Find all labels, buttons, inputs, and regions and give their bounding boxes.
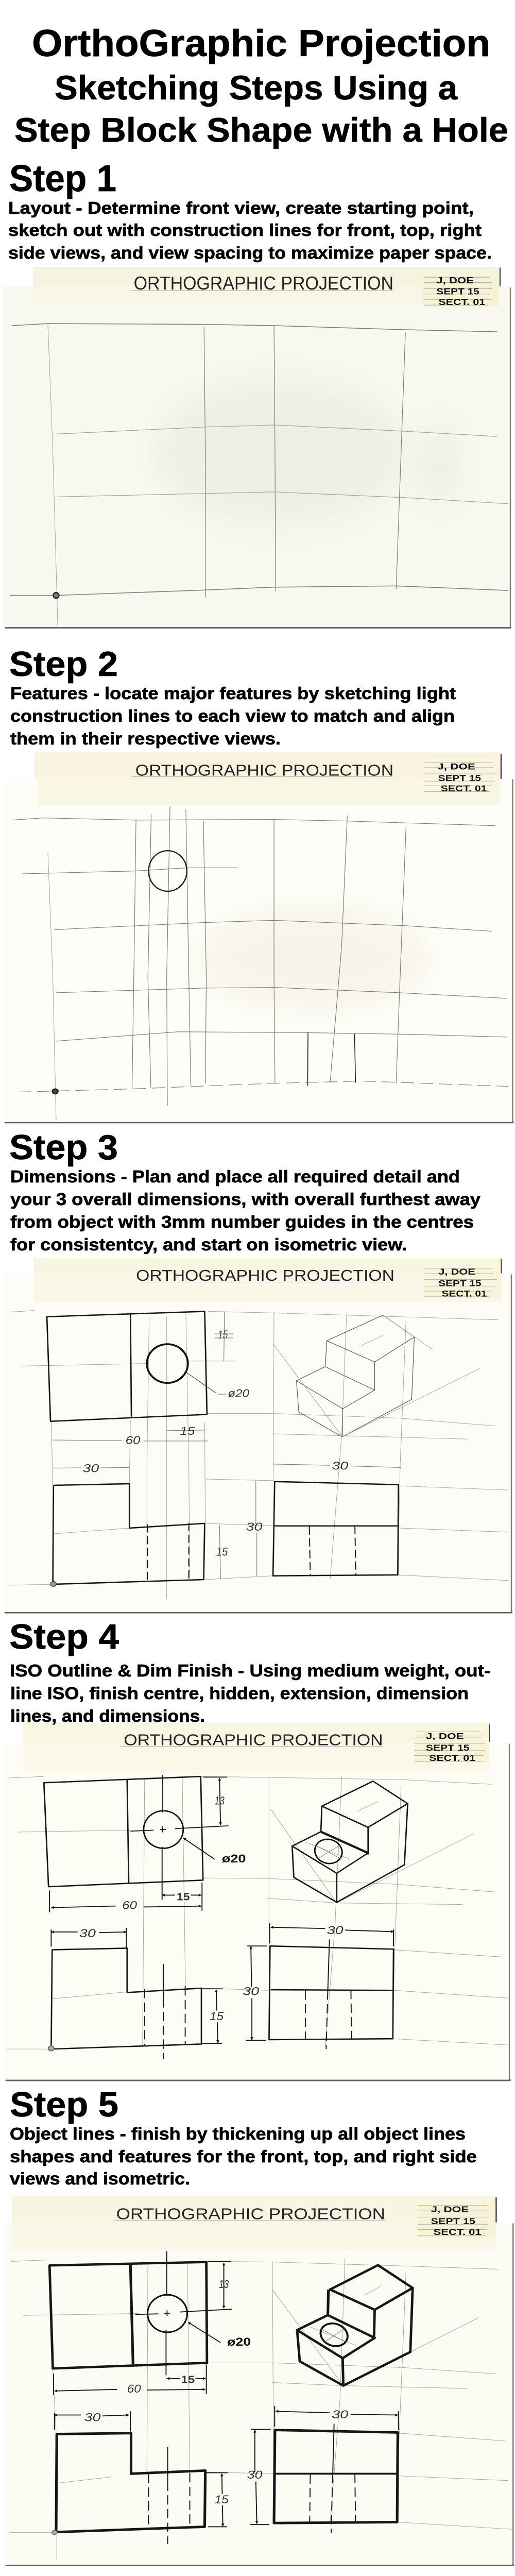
name block: SEPT 15: [431, 2217, 475, 2226]
name block: J, DOE: [426, 1732, 464, 1741]
step 5 description: [10, 2124, 477, 2188]
step 4 heading: Step 4: [9, 1617, 119, 1656]
hole circle: [148, 851, 187, 891]
top view: 15: [177, 1891, 190, 1903]
right side view: 30: [243, 1985, 260, 1997]
right side view: 30: [247, 2469, 263, 2481]
title: Step Block Shape with a Hole: [14, 111, 508, 149]
construction lines: [8, 1311, 508, 1599]
sheet title: ORTHOGRAPHIC PROJECTION: [124, 1731, 383, 1749]
name block: SEPT 15: [438, 1279, 482, 1288]
top view: [49, 2251, 251, 2395]
top view: [47, 1311, 250, 1475]
right side view: [243, 1923, 393, 2049]
step 1 description: Layout - Determine front view, create starting point,: [8, 198, 474, 217]
right side view: 30: [332, 1460, 349, 1472]
top view: ø20: [222, 1852, 246, 1865]
front view: 15: [210, 2010, 224, 2023]
step 5 description: views and isometric.: [10, 2169, 190, 2188]
step 2 description: them in their respective views.: [10, 729, 281, 748]
name block: SECT. 01: [442, 1289, 487, 1298]
front view: [55, 2411, 230, 2544]
step 3 description: [10, 1167, 481, 1254]
title: [14, 23, 508, 149]
name block: SEPT 15: [436, 287, 479, 297]
name block: SEPT 15: [438, 773, 481, 783]
panel: step 2 features sketch: [3, 752, 513, 1123]
name block: [114, 2205, 489, 2237]
name block: J, DOE: [437, 762, 475, 771]
panel: step 5 object lines sketch: [5, 2196, 514, 2566]
name block: SECT. 01: [441, 784, 487, 793]
front view: 15: [216, 1546, 228, 1558]
right side view: [273, 1460, 401, 1576]
step 3 description: your 3 overall dimensions, with overall furthest away: [10, 1190, 481, 1209]
top view: 15: [180, 1425, 195, 1437]
step 4 description: ISO Outline & Dim Finish - Using medium weight, out-: [10, 1661, 490, 1680]
panel: step 3 dimensions sketch: [3, 1258, 512, 1613]
top view: 60: [127, 2382, 141, 2395]
top view: 30: [82, 1462, 99, 1475]
step 2 description: construction lines to each view to match and align: [10, 706, 455, 725]
name block: [130, 276, 492, 308]
top view: ø20: [227, 2336, 251, 2348]
sheet title: ORTHOGRAPHIC PROJECTION: [134, 273, 393, 294]
top view: [44, 1775, 246, 1912]
panel: step 1 layout sketch: [3, 267, 511, 629]
name block: SECT. 01: [438, 298, 485, 308]
name block: SECT. 01: [434, 2227, 482, 2237]
sheet title: ORTHOGRAPHIC PROJECTION: [136, 1267, 394, 1284]
starting point: [53, 592, 59, 598]
step 2 description: Features - locate major features by sketching light: [10, 684, 456, 703]
name block: [132, 1267, 497, 1298]
top view: 60: [126, 1434, 141, 1447]
name block: J, DOE: [436, 276, 474, 285]
name block: J, DOE: [438, 1267, 475, 1277]
starting point: [52, 1089, 58, 1094]
name block: [132, 762, 497, 793]
step 4 description: [10, 1661, 490, 1725]
panel: step 4 iso outline sketch: [5, 1722, 511, 2081]
front view: 30: [246, 1520, 263, 1533]
sheet title: ORTHOGRAPHIC PROJECTION: [116, 2205, 385, 2223]
step 3 description: Dimensions - Plan and place all required detail and: [10, 1167, 460, 1186]
step 3 heading: Step 3: [9, 1128, 118, 1167]
sheet title: ORTHOGRAPHIC PROJECTION: [135, 762, 393, 779]
step 4 description: lines, and dimensions.: [10, 1706, 205, 1725]
step 5 description: Object lines - finish by thickening up all object lines: [10, 2124, 466, 2143]
step 2 heading: Step 2: [9, 645, 118, 684]
name block: J, DOE: [431, 2205, 469, 2214]
right side view: 30: [332, 2409, 349, 2421]
top view: 15: [181, 2374, 195, 2386]
step 1 description: side views, and view spacing to maximize paper space.: [8, 243, 492, 262]
construction lines: [7, 1776, 508, 2049]
step 3 description: from object with 3mm number guides in the centres: [10, 1212, 474, 1231]
isometric view: [267, 1781, 474, 1905]
step 1 description: [8, 198, 492, 262]
top view: 15: [218, 1329, 228, 1341]
construction lines: [10, 2258, 512, 2561]
step 5 heading: Step 5: [10, 2085, 118, 2124]
front view: [51, 1927, 226, 2059]
front view: 15: [215, 2494, 229, 2506]
right side view: [247, 2406, 399, 2533]
top view: 13: [215, 1794, 225, 1807]
name block: [121, 1732, 485, 1763]
name block: SECT. 01: [429, 1753, 475, 1763]
step 4 description: line ISO, finish centre, hidden, extension, dimension: [10, 1684, 469, 1703]
top view: 13: [219, 2278, 229, 2291]
construction lines: [11, 806, 508, 1121]
front view: 30: [79, 1927, 96, 1940]
step 1 description: sketch out with construction lines for front, top, right: [8, 221, 482, 240]
construction lines: [10, 324, 508, 626]
top view: ø20: [228, 1387, 250, 1400]
top view: 60: [122, 1899, 138, 1912]
isometric view: [272, 2265, 478, 2388]
right side view: 30: [327, 1924, 344, 1937]
name block: SEPT 15: [426, 1743, 470, 1753]
step 3 description: for consistentcy, and start on isometric view.: [10, 1235, 407, 1254]
starting point: [52, 2530, 57, 2535]
step 1 heading: Step 1: [9, 158, 116, 199]
front view: [50, 1481, 263, 1586]
starting point: [48, 2046, 54, 2051]
step 5 description: shapes and features for the front, top, and right side: [10, 2147, 477, 2166]
title: Sketching Steps Using a: [55, 69, 458, 107]
isometric view outline: [272, 1315, 480, 1439]
front view: 30: [84, 2411, 101, 2424]
title: OrthoGraphic Projection: [32, 23, 490, 64]
step 2 description: [10, 684, 456, 748]
